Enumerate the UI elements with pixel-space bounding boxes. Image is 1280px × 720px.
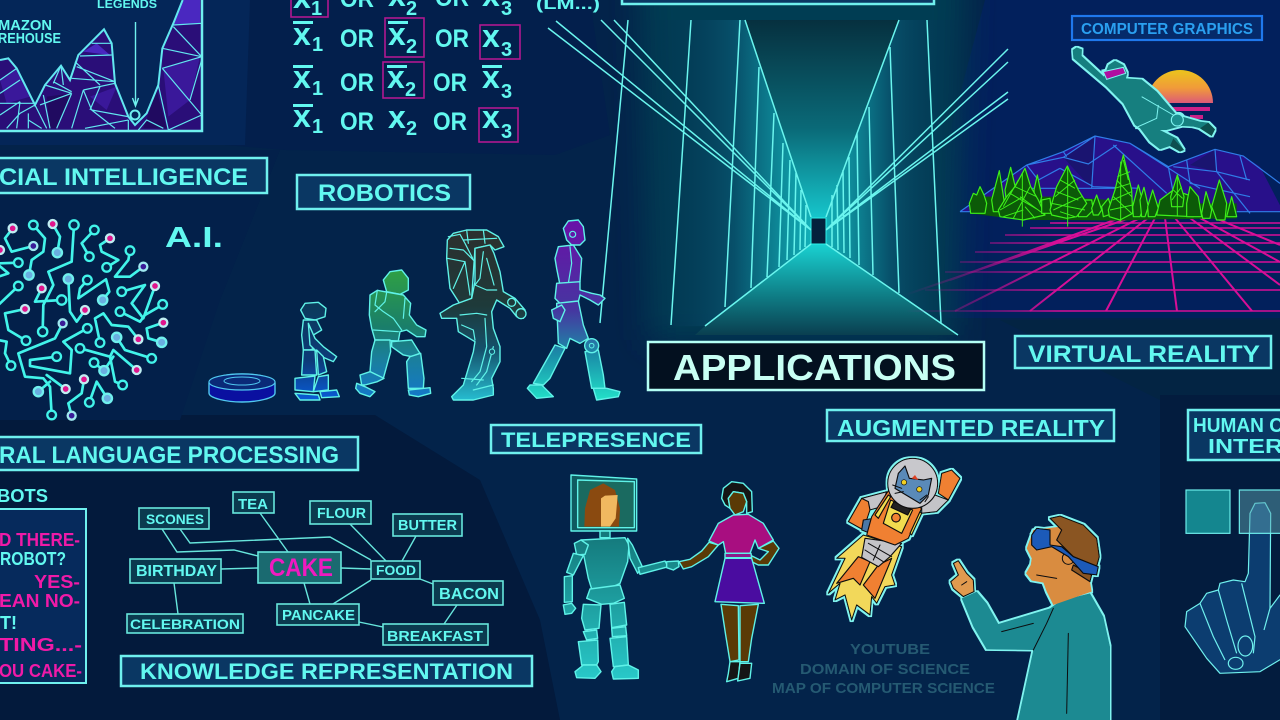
node: flour <box>310 501 371 524</box>
row 3: 1 <box>312 78 323 100</box>
arrow: to minimum <box>130 22 140 120</box>
node: birthday <box>130 559 221 583</box>
hair <box>1050 516 1099 567</box>
row 3: x <box>387 59 405 95</box>
panel: chatbot dialogue: EAN NO- <box>0 591 80 611</box>
text: A.I.: A.I. <box>165 222 223 254</box>
row 1 <box>291 0 512 20</box>
panel: right lower background <box>1000 320 1280 400</box>
row 4: OR <box>340 108 374 136</box>
top heading box <box>622 0 934 4</box>
text: credit: MAP OF COMPUTER SCIENCE <box>772 680 995 697</box>
heading: applications <box>648 342 984 390</box>
node: food: FOOD <box>376 562 416 578</box>
row 2: x <box>293 16 311 52</box>
heading: telepresence: TELEPRESENCE <box>501 429 691 452</box>
panel: boolean clauses <box>291 0 600 143</box>
panel: chatbot dialogue: TING...- <box>0 635 82 655</box>
icon: man in headset <box>951 516 1110 720</box>
node: birthday: BIRTHDAY <box>136 563 217 580</box>
heading: natural language processing: RAL LANGUAGE PROCESSING <box>0 442 339 469</box>
corridor glow <box>640 0 965 340</box>
panel: computer graphics background <box>945 0 1280 318</box>
panel: knowledge background <box>0 415 560 720</box>
node: scones: SCONES <box>146 511 204 527</box>
icon: woman shaking hands <box>679 482 779 682</box>
node: butter <box>393 514 462 536</box>
node: pancake: PANCAKE <box>282 607 355 624</box>
text: credit <box>772 641 995 697</box>
icon: synthwave sun <box>1147 70 1213 119</box>
heading: computer graphics: COMPUTER GRAPHICS <box>1081 21 1253 38</box>
heading: artificial intelligence: CIAL INTELLIGENCE <box>0 164 248 191</box>
row 3: x <box>482 59 500 95</box>
panel: chatbot dialogue: OU CAKE- <box>0 661 82 681</box>
row 3: 2 <box>405 79 416 101</box>
touch button left <box>1186 490 1230 533</box>
node: tea: TEA <box>238 496 268 513</box>
node: bacon: BACON <box>439 586 499 603</box>
row 2: x <box>388 16 406 52</box>
node: tea <box>233 492 274 513</box>
node: bacon <box>433 581 503 605</box>
icon: cat astronaut rocket <box>828 458 960 620</box>
icon: neon trees <box>969 155 1237 227</box>
icon: backpack robot <box>440 230 526 400</box>
row 4: x <box>293 98 311 134</box>
panel: chatbot dialogue: ROBOT? <box>0 549 66 569</box>
panel: database background <box>0 0 610 155</box>
node: breakfast: BREAKFAST <box>387 628 483 645</box>
heading: human computer interaction <box>1188 410 1280 460</box>
corridor end door <box>811 218 826 244</box>
icon: pointing hand on touch buttons <box>1185 490 1280 673</box>
panel: chatbot dialogue <box>0 509 86 683</box>
heading: human computer interaction: INTER <box>1208 436 1280 458</box>
row 3 <box>293 59 512 103</box>
chart: knowledge graph <box>127 492 503 645</box>
node: flour: FLOUR <box>317 505 366 522</box>
node: scones <box>139 508 209 529</box>
node: butter: BUTTER <box>398 517 457 534</box>
icon: circuit brain <box>0 220 167 420</box>
icon: telepresence robot <box>563 475 679 679</box>
heading: artificial intelligence <box>0 158 267 193</box>
panel: chatbot dialogue: T! <box>0 613 17 633</box>
row 2: 2 <box>406 36 417 58</box>
node: celebration: CELEBRATION <box>130 616 240 632</box>
touch button right <box>1239 490 1280 533</box>
row 4: x <box>388 99 406 135</box>
row 3: x <box>293 59 311 95</box>
graph edges <box>162 513 457 627</box>
row 2: x <box>482 18 500 54</box>
monitor head <box>571 475 637 531</box>
icon: green humanoid robot <box>356 270 431 397</box>
hand <box>1185 503 1280 673</box>
heading: computer graphics <box>1072 16 1262 40</box>
row 2: OR <box>435 25 469 53</box>
row 2: 3 <box>501 39 512 61</box>
row 4 <box>293 98 518 143</box>
row 2: OR <box>340 25 374 53</box>
heading: telepresence <box>491 425 701 453</box>
heading: robotics <box>297 175 470 209</box>
robot body <box>563 531 679 679</box>
panel: artificial intelligence background <box>0 150 280 420</box>
row 4: x <box>482 99 500 135</box>
icon: neon grid floor <box>900 218 1280 311</box>
panel: amazon chart background <box>0 0 250 145</box>
row 2 <box>293 16 520 61</box>
panel: chatbot dialogue: YES- <box>34 572 80 592</box>
heading: applications: APPLICATIONS <box>673 347 956 388</box>
shirt <box>962 592 1110 720</box>
row 4: 3 <box>501 121 512 143</box>
panel: corridor illustration <box>548 0 1008 340</box>
text: credit: YOUTUBE <box>850 641 930 658</box>
heading: virtual reality: VIRTUAL REALITY <box>1028 341 1260 368</box>
head <box>1026 527 1092 605</box>
corridor lines <box>548 20 1008 335</box>
row 4: OR <box>433 108 467 136</box>
icon: small humanoid robot <box>295 302 339 400</box>
panel: human computer background <box>1160 395 1280 720</box>
text: amazon warehouse: REHOUSE <box>0 30 61 47</box>
hand <box>951 561 974 597</box>
heading: augmented reality: AUGMENTED REALITY <box>837 415 1105 441</box>
panel: chatbot dialogue: D THERE- <box>0 530 80 550</box>
terrain <box>0 0 202 130</box>
heading: knowledge representation: KNOWLEDGE REPRESENTATION <box>140 659 513 684</box>
row 3: OR <box>433 69 467 97</box>
icon: walking android <box>527 220 620 400</box>
row 2: 1 <box>312 34 323 56</box>
heading: robotics: ROBOTICS <box>318 180 451 207</box>
node: cake: CAKE <box>269 554 333 582</box>
row 4: 1 <box>312 116 323 138</box>
icon: wireframe mountains <box>960 136 1280 213</box>
corridor floor <box>695 244 958 335</box>
icon: robot vacuum <box>209 374 275 402</box>
goggles <box>1032 528 1098 575</box>
row 4: 2 <box>406 118 417 140</box>
chart: amazon warehouse landscape <box>0 0 202 131</box>
text: credit: DOMAIN OF SCIENCE <box>800 661 970 678</box>
icon: flying man in headset <box>1073 47 1215 152</box>
row 3: OR <box>340 69 374 97</box>
row 3: 3 <box>501 81 512 103</box>
text: amazon warehouse <box>0 17 61 47</box>
